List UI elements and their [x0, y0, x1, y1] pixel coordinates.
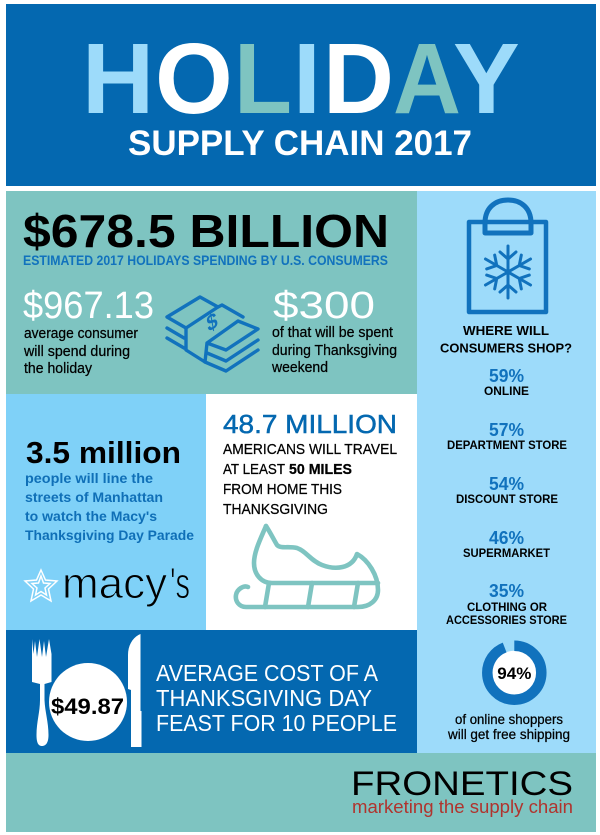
stat: average spend: will spend during — [23, 344, 130, 360]
panel: consumer spending — [6, 191, 417, 394]
stat: discount store — [456, 474, 558, 506]
title: HOLIDAY: A — [393, 23, 461, 135]
free shipping caption: will get free shipping — [447, 727, 570, 742]
icon: fork — [32, 639, 52, 746]
feast caption: FEAST FOR 10 PEOPLE — [156, 710, 397, 736]
plate with price — [49, 663, 127, 741]
stat: supermarket: 46% — [489, 528, 524, 548]
parade caption: streets of Manhattan — [25, 489, 163, 505]
stat: supermarket: SUPERMARKET — [463, 548, 550, 560]
travel caption: AMERICANS WILL TRAVEL — [223, 442, 397, 458]
heading: where will consumers shop: CONSUMERS SHOP? — [440, 340, 572, 356]
stat: clothing or accessories store: 35% — [489, 581, 524, 601]
stat: online: ONLINE — [484, 386, 529, 398]
subtitle: SUPPLY CHAIN 2017 — [128, 124, 472, 163]
headline figure: $678.5 BILLION — [23, 205, 389, 257]
stat: department store: 57% — [489, 420, 524, 440]
stat: clothing or accessories store: CLOTHING OR — [467, 602, 548, 614]
stat: average spend: the holiday — [24, 361, 93, 377]
title: HOLIDAY: Y — [453, 23, 520, 135]
panel: footer — [6, 753, 596, 832]
icon: stack of money — [167, 297, 258, 371]
title: HOLIDAY: L — [234, 23, 292, 135]
heading: where will consumers shop: WHERE WILL — [463, 323, 549, 338]
logo: fronetics: FRONETICS — [351, 765, 573, 803]
travel figure: 48.7 MILLION — [223, 409, 397, 439]
panel: header — [6, 4, 596, 186]
stat: thanksgiving weekend spend: of that will be spent — [272, 325, 393, 341]
title: HOLIDAY: H — [82, 23, 154, 135]
tagline: marketing the supply chain — [352, 796, 573, 817]
panel: thanksgiving travel — [206, 394, 417, 630]
travel caption: THANKSGIVING — [223, 502, 328, 518]
headline caption: ESTIMATED 2017 HOLIDAYS SPENDING BY U.S. CONSUMERS — [23, 252, 388, 268]
logo: macy's wordmark: 's — [170, 559, 190, 608]
panel: feast cost — [6, 630, 417, 753]
parade caption: people will line the — [25, 470, 153, 486]
donut chart: 94 percent — [487, 646, 541, 700]
stat: clothing or accessories store: ACCESSORIES STORE — [446, 615, 567, 627]
stat: department store — [447, 420, 567, 452]
panel: macy's parade — [6, 394, 206, 630]
icon: knife — [128, 634, 142, 747]
stat: discount store: DISCOUNT STORE — [456, 494, 558, 506]
parade caption: Thanksgiving Day Parade — [25, 527, 194, 543]
stat: online — [484, 366, 529, 398]
title: HOLIDAY: I — [293, 23, 321, 135]
stat: department store: DEPARTMENT STORE — [447, 440, 567, 452]
title: HOLIDAY: O — [155, 23, 233, 135]
title: HOLIDAY: D — [323, 23, 394, 135]
icon: sleigh skate — [236, 526, 378, 607]
stat: thanksgiving weekend spend: $300 — [273, 285, 375, 327]
icon: macy's star — [25, 570, 57, 601]
stat: supermarket — [463, 528, 550, 560]
parade figure: 3.5 million — [26, 435, 181, 470]
stat: average spend — [23, 285, 154, 377]
icon: shopping bag with snowflake — [469, 200, 546, 312]
travel caption: 50 MILES — [289, 462, 352, 478]
panel: where will consumers shop — [417, 191, 596, 753]
stat: online: 59% — [489, 366, 524, 386]
stat: average spend: $967.13 — [23, 285, 154, 327]
travel caption: FROM HOME THIS — [223, 482, 342, 498]
icon: stack of money: $ — [205, 306, 219, 337]
parade caption: to watch the Macy's — [25, 508, 157, 524]
donut chart: 94 percent: 94% — [497, 664, 531, 683]
logo: macy's wordmark: macy — [62, 559, 167, 608]
free shipping caption: of online shoppers — [455, 712, 563, 727]
travel caption: AT LEAST — [223, 462, 285, 478]
stat: average spend: average consumer — [24, 326, 138, 342]
stat: clothing or accessories store — [446, 581, 567, 627]
stat: discount store: 54% — [489, 474, 524, 494]
stat: thanksgiving weekend spend: weekend — [271, 360, 328, 376]
stat: thanksgiving weekend spend: during Thanksgiving — [272, 343, 397, 359]
plate with price: $49.87 — [51, 694, 124, 719]
feast caption: AVERAGE COST OF A — [156, 660, 379, 686]
stat: thanksgiving weekend spend — [271, 285, 397, 376]
feast caption: THANKSGIVING DAY — [156, 685, 372, 711]
